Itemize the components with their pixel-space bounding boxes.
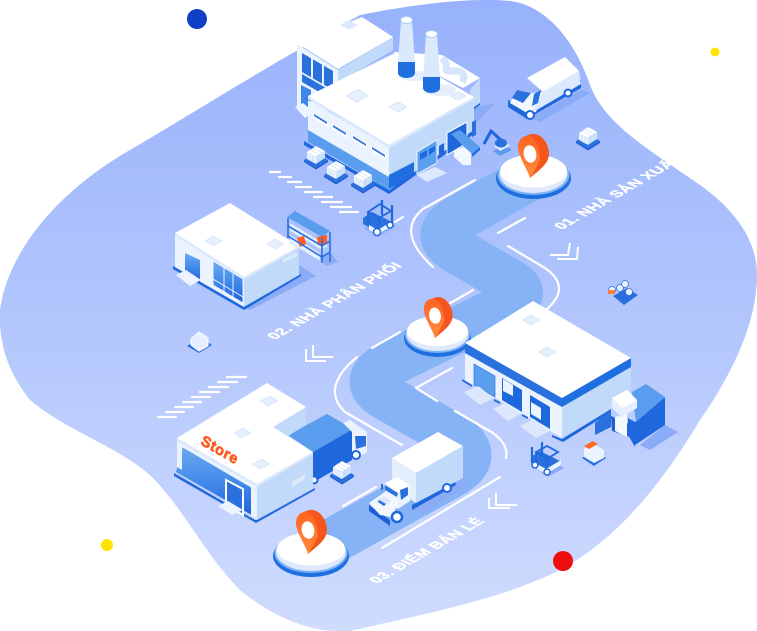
distributor building [173, 203, 316, 310]
chevrons [306, 243, 578, 508]
truck cab [385, 477, 410, 509]
road [320, 178, 530, 548]
roof shadows around chimneys [399, 71, 431, 81]
forklift 2 [531, 442, 564, 477]
container [632, 384, 678, 450]
label: 03 retail: 03. ĐIỂM BÁN LẺ [364, 515, 489, 586]
label: 02 distributor: 02. NHÀ PHÂN PHỐI [262, 260, 407, 342]
chimneys [398, 16, 440, 93]
factory door and dock [417, 120, 480, 182]
pin marker [296, 510, 327, 554]
shelf [287, 211, 338, 266]
factory [295, 16, 495, 194]
store door [226, 480, 243, 515]
warehouse [462, 301, 678, 450]
factory pallets [304, 146, 375, 194]
loading pads [464, 386, 494, 405]
store [174, 383, 367, 523]
factory windows [313, 113, 386, 160]
store sign: Store [198, 433, 241, 468]
pin 3 [273, 510, 349, 577]
warehouse walls [465, 353, 562, 438]
dot: red [553, 551, 573, 571]
back factory wing [393, 52, 480, 112]
dot: blue [187, 9, 207, 29]
dashes near factory [270, 172, 358, 212]
warehouse doors [474, 364, 495, 397]
delivery truck [369, 432, 472, 526]
barrels pallet [608, 280, 638, 305]
factory shadow [473, 103, 495, 124]
warehouse vents [522, 315, 540, 325]
robot arm [484, 131, 512, 156]
store walls [273, 407, 306, 436]
store vents [260, 396, 278, 406]
forklift 1 [363, 200, 396, 237]
back office block [295, 17, 393, 118]
pin 2 [404, 297, 471, 357]
dot: yellow bottom [101, 539, 113, 551]
pallet top right [576, 127, 600, 150]
distributor shadow [244, 265, 316, 310]
blue truck behind store [288, 414, 367, 484]
dashes near store [158, 377, 246, 417]
pin marker [424, 297, 453, 338]
label: 01 manufacturer: 01. NHÀ SẢN XUẤT [550, 154, 688, 232]
roof vents [346, 89, 466, 112]
van [508, 57, 590, 122]
store pallet [330, 461, 354, 484]
distributor windows [213, 261, 243, 303]
road edge lines [335, 180, 559, 548]
distributor door [185, 253, 200, 282]
pin 1 [496, 134, 571, 199]
dot: yellow top [710, 48, 720, 56]
pin marker [518, 134, 549, 178]
small box pallet [187, 332, 212, 353]
main building [304, 52, 474, 194]
distributor vents [205, 236, 222, 246]
side loading opening [595, 410, 611, 435]
boxes pallet [582, 441, 606, 466]
